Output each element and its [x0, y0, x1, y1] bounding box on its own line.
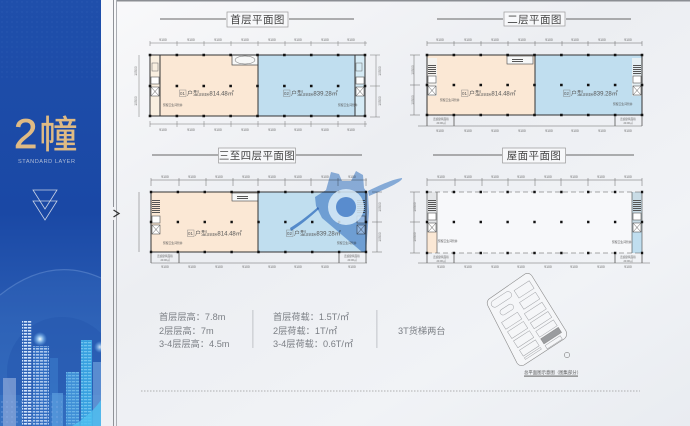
- dimension labels: 9100: [187, 128, 195, 132]
- unit label 01: 户型建筑面积814.48㎡: [469, 90, 516, 98]
- dimension labels: 9100: [571, 38, 579, 42]
- dimension labels: 9100: [464, 175, 472, 179]
- dimension labels: 9100: [348, 175, 356, 179]
- unit label 01: 01: [180, 91, 185, 96]
- dimension labels: 9100: [268, 128, 276, 132]
- subheading: standard layer: STANDARD LAYER: [18, 159, 76, 165]
- annex and dimension lines: [410, 178, 650, 263]
- dimension labels: 9100: [268, 175, 276, 179]
- annex and dimension lines: [139, 178, 382, 263]
- dimension labels: 9100: [347, 38, 355, 42]
- dimension labels: 9100: [214, 128, 222, 132]
- dimension labels: 连廊建筑面积: [157, 254, 173, 258]
- dimension labels: 9100: [570, 175, 578, 179]
- dimension labels: 9100: [624, 175, 632, 179]
- floor plan drawing: 预留卫生间管井: [337, 241, 357, 245]
- dimension labels: 9100: [159, 128, 167, 132]
- dimension lines: [139, 41, 380, 127]
- floor plan drawing: 预留卫生间管井: [163, 241, 183, 245]
- dimension labels: 连廊建筑面积: [433, 117, 449, 121]
- unit label 02: 02: [287, 231, 292, 236]
- heading: ground floor: [160, 12, 354, 27]
- floor plan drawing: 预留卫生间管井: [163, 103, 183, 107]
- unit label 02: [286, 230, 341, 238]
- dimension labels: 9100: [624, 129, 632, 133]
- unit label 01: 01: [188, 231, 193, 236]
- dimension labels: 9100: [268, 38, 276, 42]
- text block: floor heights: 3-4层层高：4.5m: [159, 338, 230, 349]
- unit label 02: [284, 90, 338, 98]
- panel: ground floor plan: [134, 12, 382, 132]
- dimension labels: 9100: [321, 175, 329, 179]
- floor plan drawing: [426, 55, 644, 115]
- dimension labels: 9100: [491, 265, 499, 269]
- dimension labels: 9100: [464, 265, 472, 269]
- dimension labels: 9100: [597, 265, 605, 269]
- dimension labels: 10500: [134, 66, 138, 76]
- dimension labels: [134, 38, 382, 132]
- illustration: city skyline: [0, 320, 106, 426]
- dimension labels: 9100: [517, 175, 525, 179]
- dimension labels: 9100: [545, 129, 553, 133]
- dimension labels: 10500: [378, 232, 382, 242]
- dimension labels: 9100: [188, 175, 196, 179]
- divider: vertical double rule with chevron: [113, 0, 119, 426]
- panel: roof plan: [410, 148, 650, 269]
- unit label 01: 户型建筑面积814.48㎡: [187, 90, 234, 98]
- unit label 01: 户型建筑面积814.48㎡: [195, 230, 242, 238]
- dimension labels: 连廊建筑面积: [620, 255, 636, 259]
- floor plan drawing: [150, 192, 368, 252]
- dimension labels: 10500: [378, 96, 382, 106]
- dimension labels: 9100: [545, 38, 553, 42]
- dimension labels: 9100: [242, 265, 250, 269]
- dimension labels: 9100: [348, 265, 356, 269]
- heading: roof plan: 屋面平面图: [507, 150, 561, 162]
- dimension labels: 9100: [598, 129, 606, 133]
- panel: second floor plan: [410, 12, 644, 133]
- dimension labels: 9100: [518, 38, 526, 42]
- dimension labels: 9100: [321, 128, 329, 132]
- text block: floor heights: 首层层高：7.8m: [159, 311, 226, 322]
- site marker: [564, 352, 570, 358]
- site plan map: [487, 273, 570, 366]
- floor plan drawing: 预留卫生间管井: [613, 102, 633, 106]
- dimension labels: 9100: [294, 175, 302, 179]
- unit label 01: 01: [462, 91, 467, 96]
- dimension labels: 9100: [242, 175, 250, 179]
- heading: ground floor: 首层平面图: [230, 13, 285, 26]
- top rule: [117, 0, 690, 2]
- panel: third to fourth floor plan: [139, 148, 382, 269]
- dimension labels: 9100: [491, 129, 499, 133]
- dimension labels: 9100: [215, 265, 223, 269]
- unit label 02: 02: [284, 91, 289, 96]
- text block: floor loads: 2层荷载：1T/㎡: [273, 325, 337, 336]
- dimension labels: 9100: [241, 128, 249, 132]
- unit label 02: [564, 90, 618, 98]
- unit label 01: [180, 90, 234, 98]
- dimension labels: 9100: [215, 175, 223, 179]
- roof drawing: 预留卫生间管井: [612, 240, 632, 244]
- dimension labels: [157, 175, 382, 269]
- roof drawing: [426, 192, 644, 253]
- caption: site plan: 总平面图示意图（图集部分）: [524, 369, 581, 376]
- dimension labels: 10500: [413, 202, 417, 212]
- dimension labels: [411, 38, 636, 133]
- dimension labels: 10500: [378, 202, 382, 212]
- dimension labels: 9100: [544, 265, 552, 269]
- icon: double triangles: [33, 190, 57, 220]
- dimension labels: 9100: [268, 265, 276, 269]
- dimension labels: 9100: [464, 129, 472, 133]
- dimension labels: 9100: [437, 175, 445, 179]
- dimension labels: 9100: [188, 265, 196, 269]
- dimension labels: 9100: [571, 129, 579, 133]
- dimension labels: 9100: [597, 175, 605, 179]
- dimension labels: 9100: [161, 265, 169, 269]
- unit label 02: 户型建筑面积839.28㎡: [571, 90, 618, 98]
- dimension labels: 20.00㎡: [436, 259, 446, 263]
- text block: floor heights: [159, 311, 230, 349]
- heading: second floor: 二层平面图: [507, 14, 562, 26]
- heading: roof plan: [433, 148, 634, 163]
- floor plan drawing: [149, 55, 367, 116]
- dimension labels: 10500: [413, 232, 417, 242]
- dimension labels: 9100: [294, 265, 302, 269]
- unit label 02: 户型建筑面积839.28㎡: [294, 230, 341, 238]
- dimension labels: 9100: [598, 38, 606, 42]
- text block: floor loads: 首层荷载：1.5T/㎡: [273, 311, 349, 322]
- unit label 01: [462, 90, 516, 98]
- dimension labels: 9100: [491, 38, 499, 42]
- dimension labels: 9100: [437, 265, 445, 269]
- dimension labels: 9100: [518, 129, 526, 133]
- unit label 01: [188, 230, 242, 238]
- dimension labels: 20.00㎡: [623, 121, 633, 125]
- annex and dimension lines: [410, 41, 642, 126]
- text block: floor loads: [273, 311, 353, 349]
- dimension labels: 9100: [347, 128, 355, 132]
- dimension labels: 9100: [570, 265, 578, 269]
- unit label 02: 02: [564, 91, 569, 96]
- unit label 02: 户型建筑面积839.28㎡: [291, 90, 338, 98]
- floor plan drawing: 预留卫生间管井: [440, 98, 460, 102]
- dimension labels: 连廊建筑面积: [344, 254, 360, 258]
- dotted divider: [141, 390, 640, 392]
- heading: building number: 2幢: [14, 110, 77, 157]
- dimension labels: 10500: [134, 96, 138, 106]
- dimension labels: 9100: [294, 38, 302, 42]
- dimension labels: 9100: [321, 38, 329, 42]
- watermark: planet location logo: [290, 171, 402, 252]
- dimension labels: 9100: [159, 38, 167, 42]
- dimension labels: 9100: [544, 175, 552, 179]
- divider: [376, 310, 378, 348]
- roof drawing: 预留卫生间管井: [438, 239, 458, 243]
- dimension labels: 20.00㎡: [347, 258, 357, 262]
- heading: second floor: [437, 12, 631, 26]
- dimension labels: 9100: [436, 38, 444, 42]
- dimension labels: 9100: [464, 38, 472, 42]
- dimension labels: 9100: [436, 129, 444, 133]
- dimension labels: 连廊建筑面积: [433, 255, 449, 259]
- dimension labels: 10500: [378, 66, 382, 76]
- text block: floor loads: 3-4层荷载：0.6T/㎡: [273, 338, 353, 349]
- dimension labels: 9100: [214, 38, 222, 42]
- dimension labels: 9100: [294, 128, 302, 132]
- floor plan drawing: 预留卫生间管井: [338, 103, 358, 107]
- dimension labels: 10500: [411, 65, 415, 75]
- panel: left blue sidebar: [0, 0, 101, 426]
- dimension labels: 10500: [411, 95, 415, 105]
- dimension labels: 9100: [241, 38, 249, 42]
- dimension labels: 连廊建筑面积: [620, 117, 636, 121]
- dimension labels: 9100: [624, 265, 632, 269]
- dimension labels: 20.00㎡: [623, 259, 633, 263]
- dimension labels: 9100: [321, 265, 329, 269]
- dimension labels: 9100: [491, 175, 499, 179]
- dimension labels: 9100: [624, 38, 632, 42]
- divider: [252, 310, 254, 348]
- dimension labels: 9100: [187, 38, 195, 42]
- heading: third to fourth floor: 三至四层平面图: [219, 150, 295, 162]
- dimension labels: 20.00㎡: [436, 121, 446, 125]
- text block: freight elevators: 3T货梯两台: [398, 325, 445, 336]
- dimension labels: 9100: [517, 265, 525, 269]
- caption: site plan: [524, 369, 581, 377]
- heading: third to fourth floor: [152, 148, 362, 163]
- text block: floor heights: 2层层高：7m: [159, 325, 214, 336]
- dimension labels: [413, 175, 636, 269]
- dimension labels: 9100: [161, 175, 169, 179]
- dimension labels: 20.00㎡: [160, 258, 170, 262]
